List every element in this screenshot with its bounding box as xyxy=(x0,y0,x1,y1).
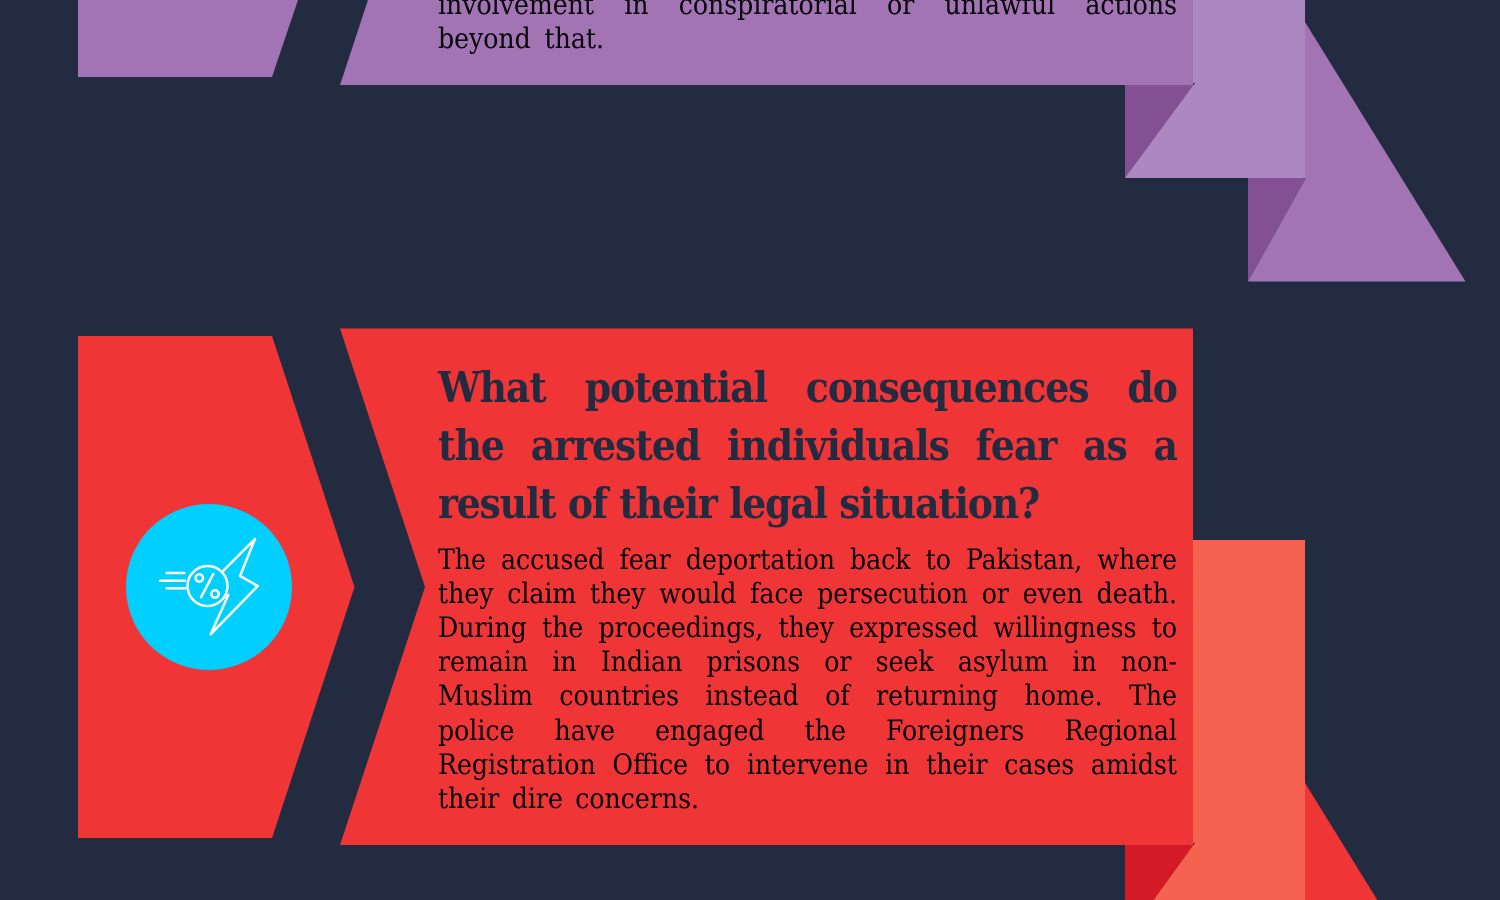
red section heading: result of their legal situation? xyxy=(438,479,1039,528)
red section body text: remain in Indian prisons or seek asylum in non- xyxy=(438,645,1177,678)
red section ribbon xyxy=(78,328,1377,900)
icon: percent lightning on cyan circle xyxy=(126,504,292,670)
red section heading: the arrested individuals fear as a xyxy=(438,421,1177,470)
red section body text: their dire concerns. xyxy=(438,782,699,815)
red section body text: police have engaged the Foreigners Regional xyxy=(438,714,1177,747)
red section heading xyxy=(438,363,1178,528)
red section body text xyxy=(438,543,1177,815)
purple section body text: beyond that. xyxy=(438,22,604,55)
purple section ribbon xyxy=(78,0,1466,282)
purple section body text xyxy=(438,0,1177,55)
red section body text: During the proceedings, they expressed willingness to xyxy=(438,611,1177,644)
red section body text: Muslim countries instead of returning home. The xyxy=(438,679,1177,712)
red section body text: they claim they would face persecution or even death. xyxy=(438,577,1177,610)
red section body text: Registration Office to intervene in their cases amidst xyxy=(438,748,1177,781)
red section heading: What potential consequences do xyxy=(438,363,1177,412)
red section body text: The accused fear deportation back to Pakistan, where xyxy=(438,543,1177,576)
